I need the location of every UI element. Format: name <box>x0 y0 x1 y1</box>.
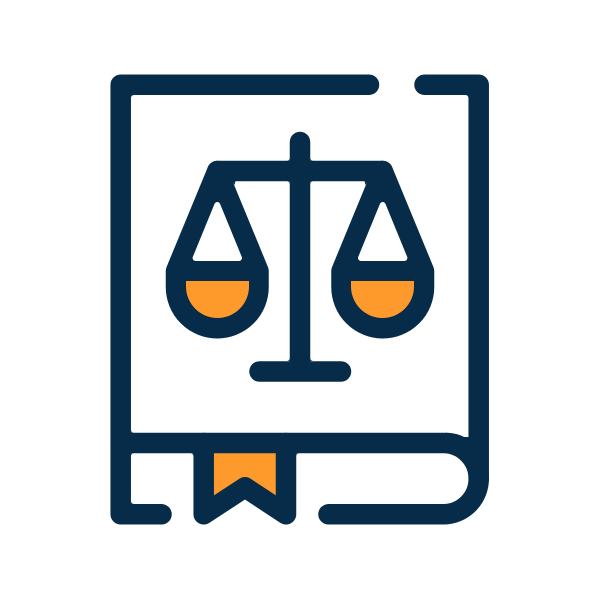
right pan silhouette <box>342 171 424 328</box>
left pan silhouette <box>176 171 258 328</box>
inner corner fillets <box>131 95 469 504</box>
scale post <box>290 142 310 371</box>
left pan triangular opening <box>196 205 239 258</box>
right pan orange fill <box>351 281 414 318</box>
bookmark outline <box>204 443 286 514</box>
left pan orange fill <box>186 281 249 318</box>
right pan triangular opening <box>361 205 404 258</box>
book page edge <box>121 443 479 479</box>
book cover left and top <box>121 85 369 514</box>
right pan <box>342 171 424 328</box>
book outline <box>121 85 479 514</box>
scale beam <box>217 161 383 181</box>
scale post, base and beam <box>217 142 383 372</box>
left pan <box>176 171 258 328</box>
book cover right and lower spine <box>328 85 479 514</box>
icon: orange bookmark fill <box>205 450 284 505</box>
scale base <box>260 361 341 382</box>
